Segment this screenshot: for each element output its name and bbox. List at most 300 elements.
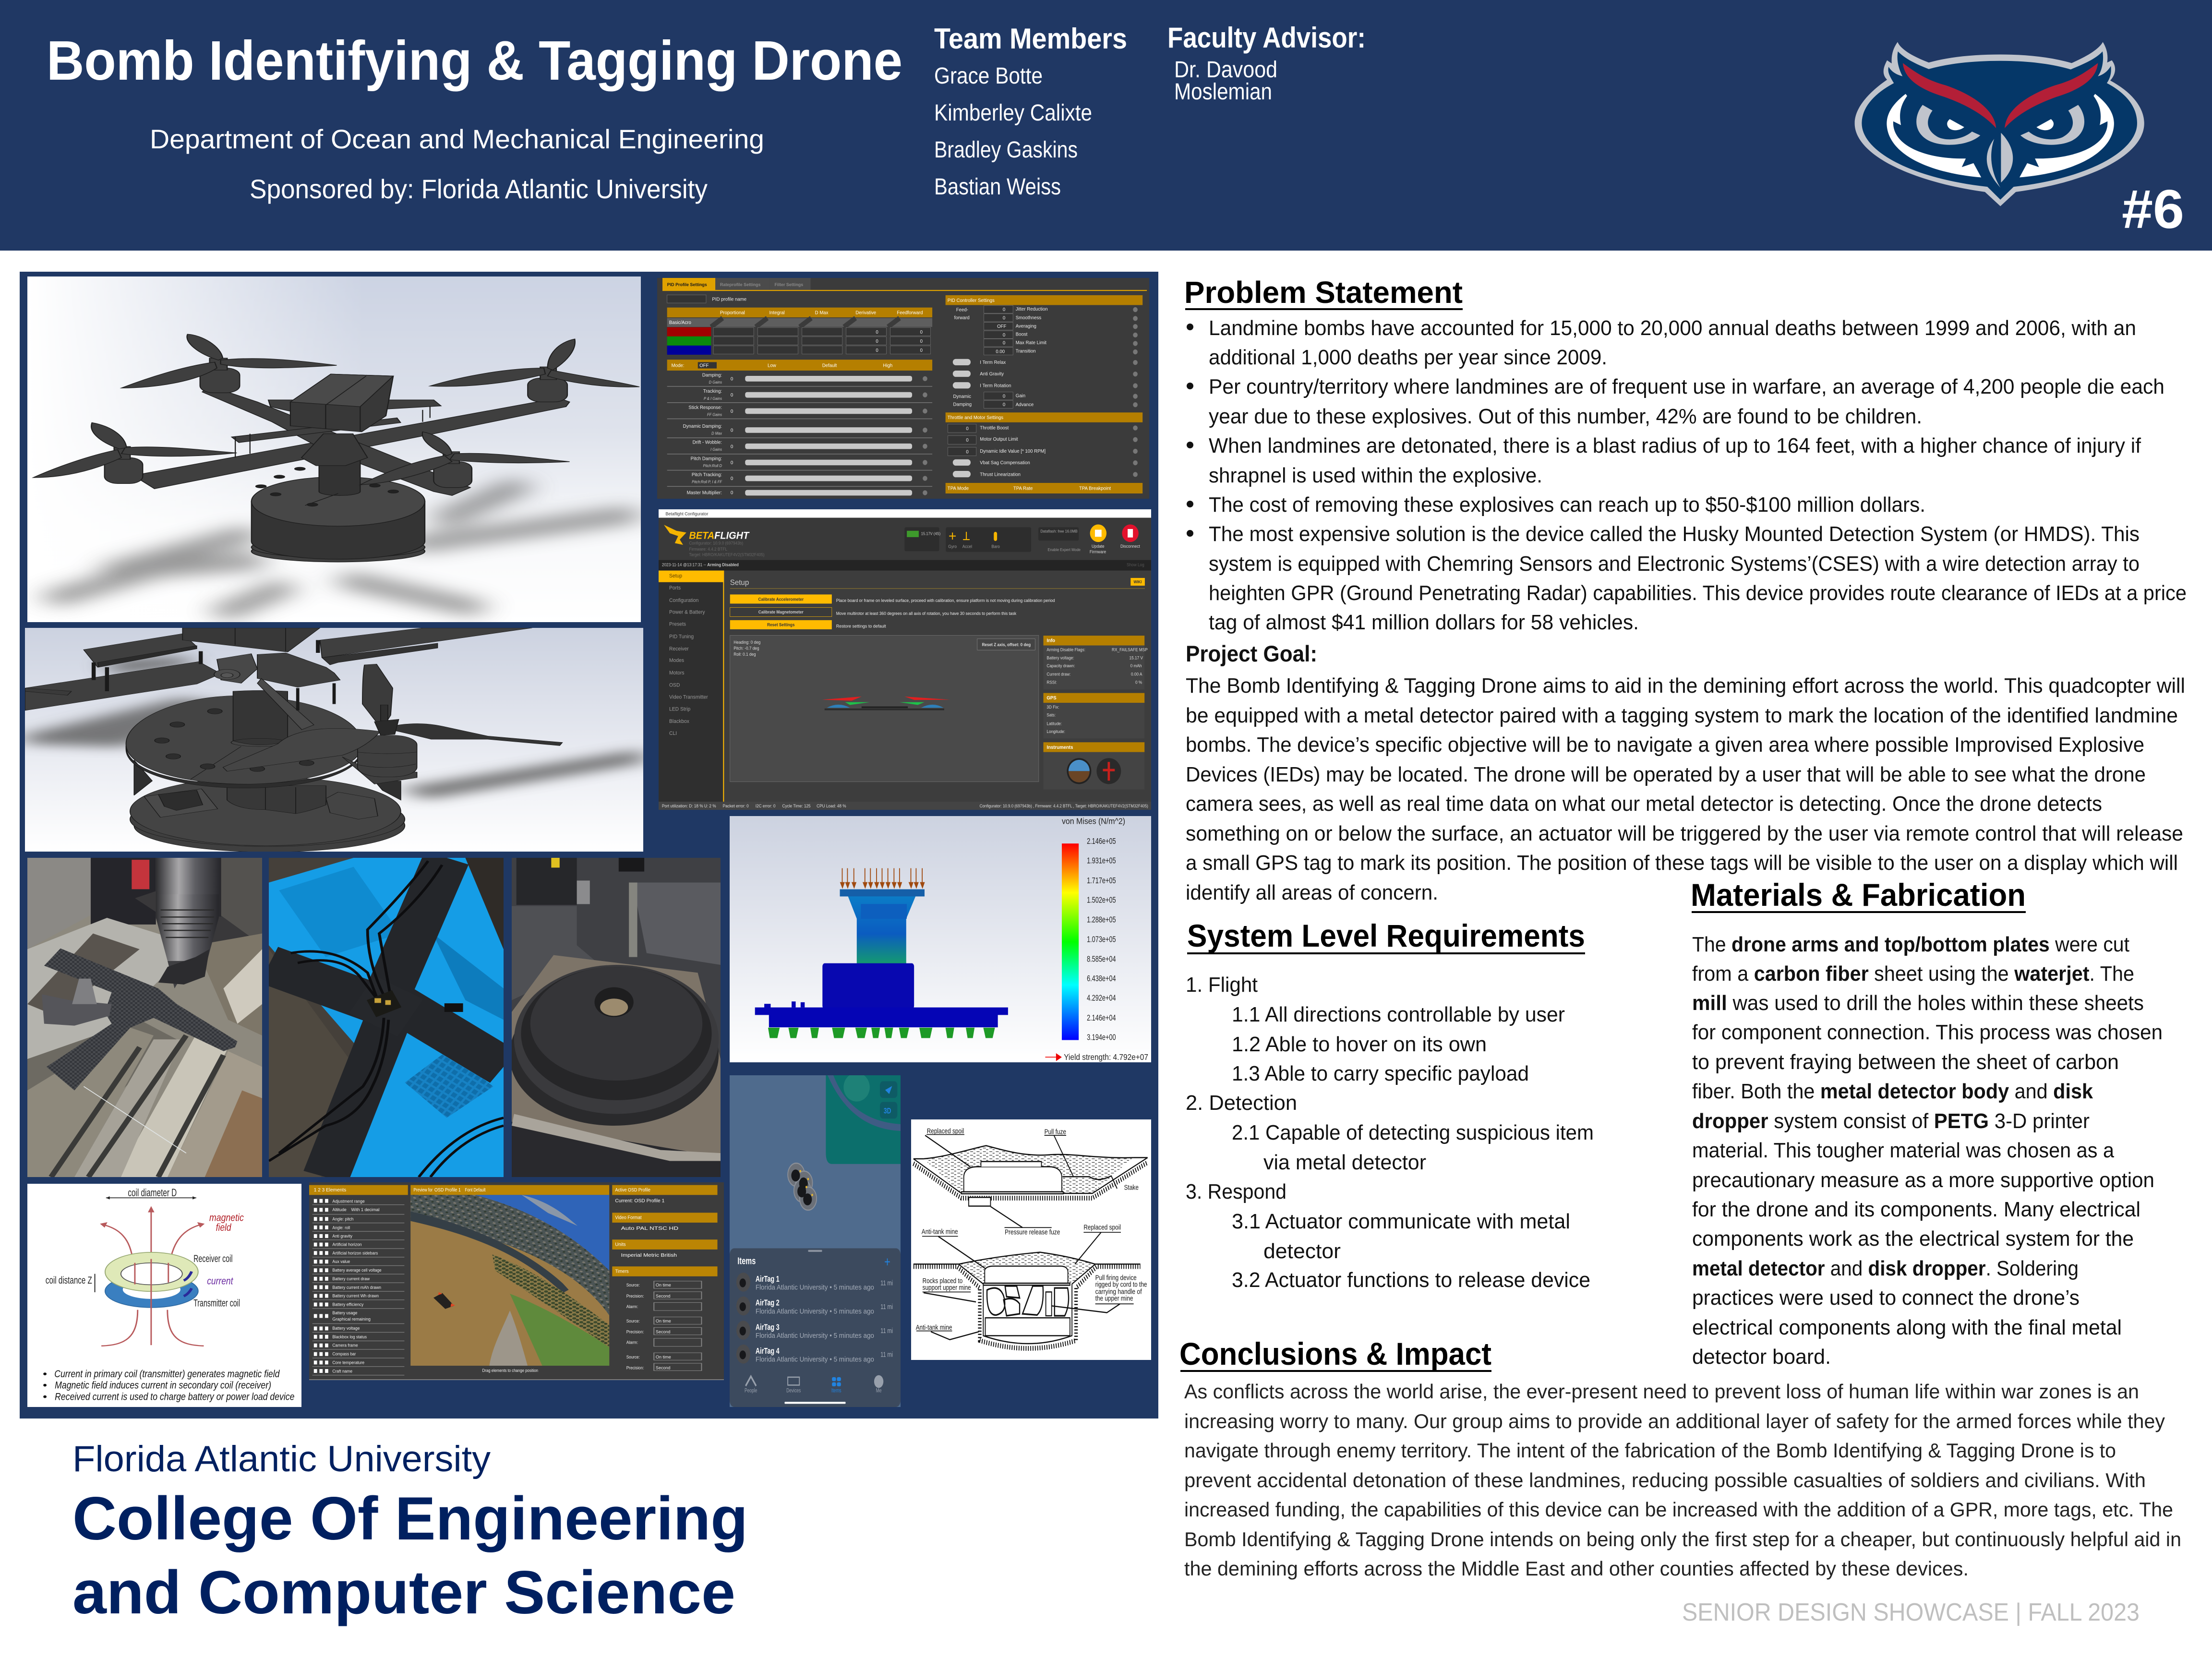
text block: conclusions: navigate through enemy territory. The intent of the fabrication of the Bomb Identifying & Tagging Drone is to (1184, 1439, 2116, 1462)
stress color scale: Yield strength: 4.792e+07 (1064, 1053, 1148, 1062)
screenshot: PID tuning settings: Damping: (702, 373, 722, 378)
screenshot: Betaflight configurator: BETAFLIGHT (689, 530, 750, 541)
screenshot: PID tuning settings: Basic/Acro (669, 320, 691, 325)
team members: Grace Botte (934, 63, 1043, 89)
screenshot: Betaflight configurator: I2C error: 0 (756, 804, 776, 808)
screenshot: OSD configuration: Current: OSD Profile 1 (615, 1198, 664, 1203)
screenshot: OSD configuration: Battery usage (332, 1310, 358, 1315)
screenshot: Betaflight configurator: Instruments (1046, 745, 1073, 750)
heading: Problem Statement: Problem Statement (1184, 275, 1463, 310)
screenshot: PID tuning settings: Anti Gravity (980, 372, 1004, 377)
screenshot: PID tuning settings: 0 (920, 348, 923, 353)
text block: materials and fabrication (1692, 933, 2163, 1369)
screenshot: Betaflight configurator: Blackbox (669, 719, 690, 724)
diagram: wireless power coil: • (43, 1368, 47, 1380)
screenshot: Betaflight configurator: Target: HBRO/KAKUTEF4V2(STM32F405) (689, 552, 765, 557)
screenshot: Betaflight configurator: LED Strip (669, 706, 690, 712)
screenshot: OSD configuration: On time (656, 1283, 671, 1287)
stress color scale: 1.288e+05 (1087, 915, 1116, 925)
screenshot: Betaflight configurator: Arming Disable Flags: (1046, 647, 1085, 652)
screenshot: PID tuning settings: 0 (1003, 402, 1006, 408)
stress color scale: 2.146e+04 (1087, 1013, 1116, 1023)
screenshot: OSD configuration: Active OSD Profile (615, 1188, 650, 1193)
screenshot: PID tuning settings: Advance (1016, 402, 1034, 408)
screenshot: PID tuning settings: Tracking: (703, 389, 722, 394)
coil label: coil diameter D (128, 1187, 177, 1199)
screenshot: PID tuning settings: Boost (1016, 332, 1028, 337)
screenshot: OSD configuration: Battery voltage (332, 1326, 360, 1331)
panel: image collage (20, 272, 1158, 1419)
screenshot: PID tuning settings: 0 (966, 438, 969, 443)
text block: problem bullets: additional 1,000 deaths per year since 2009. (1209, 346, 1607, 369)
screenshot: OSD configuration: Artificial horizon (332, 1242, 362, 1247)
screenshot: PID tuning settings: Derivative (855, 310, 877, 316)
screenshot: PID tuning settings: I Term Rotation (980, 383, 1011, 389)
screenshot: PID tuning settings: PID profile name (712, 297, 747, 302)
text block: requirements list: 1.3 Able to carry specific payload (1232, 1062, 1529, 1085)
screenshot: OSD configuration: Auto PAL NTSC HD (621, 1226, 678, 1231)
screenshot: PID tuning settings: Averaging (1016, 324, 1036, 329)
text block: problem bullets: heighten GPR (Ground Penetrating Radar) capabilities. This device provides route clearance of IEDs at a price (1209, 581, 2187, 605)
screenshot: PID tuning settings: 0 (731, 393, 733, 398)
diagram: anti-tank mine placement: Pressure release fuze (1005, 1228, 1060, 1236)
diagram: wireless power coil: field (216, 1222, 231, 1233)
text block: requirements list: 1. Flight (1186, 973, 1258, 997)
screenshot: Betaflight configurator: Video Transmitter (669, 694, 708, 700)
screenshot: OSD configuration: Preview for (413, 1188, 433, 1193)
tab bar: Me (876, 1388, 882, 1394)
motor and propeller (33, 422, 237, 483)
item list (736, 1273, 893, 1364)
stress color scale: 1.502e+05 (1087, 896, 1116, 905)
stress color scale: 3.194e+00 (1087, 1033, 1116, 1042)
screenshot: PID tuning settings: 0 (731, 460, 733, 466)
screenshot: PID tuning settings: Jitter Reduction (1016, 307, 1048, 312)
item list: 11 mi (880, 1279, 893, 1287)
screenshot: OSD configuration: Angle: pitch (332, 1216, 353, 1221)
screenshot: PID tuning settings: Proportional (720, 310, 745, 316)
screenshot: PID tuning settings: Damping (953, 402, 972, 407)
college wordmark: and Computer Science (72, 1558, 735, 1626)
screenshot: Betaflight configurator: Power & Battery (669, 609, 705, 615)
stress color scale: von Mises (N/m^2) (1062, 817, 1125, 826)
screenshot: PID tuning settings: TPA Breakpoint (1079, 486, 1111, 492)
screenshot: PID tuning settings: Low (768, 363, 777, 369)
faculty advisor: Faculty Advisor: (1167, 22, 1366, 54)
text block: project goal: identify all areas of concern. (1186, 881, 1438, 904)
diagram: wireless power coil: • (43, 1391, 47, 1402)
stress color scale: 1.073e+05 (1087, 935, 1116, 944)
image: close-up CAD render (25, 628, 643, 852)
text block: problem bullets: The cost of removing these explosives can reach up to $50-$100 million dollars. (1209, 493, 1925, 517)
text block: materials and fabrication: The drone arms and top/bottom plates were cut (1692, 933, 2129, 956)
item list: 11 mi (880, 1350, 893, 1358)
diagram: wireless power coil: Receiver coil (193, 1253, 233, 1264)
screenshot: Betaflight configurator: Accel (962, 544, 972, 549)
screenshot: OSD configuration: Battery current draw (332, 1276, 370, 1281)
tab bar: Devices (786, 1388, 801, 1394)
text block: conclusions: As conflicts across the world arise, the ever-present need to prevent loss of human life within war zones is an (1184, 1380, 2139, 1403)
diagram: anti-tank mine placement: Replaced spoil (1083, 1223, 1121, 1231)
screenshot: Betaflight configurator: Restore settings to default (836, 624, 886, 628)
screenshot: Betaflight configurator: Firmware (1090, 549, 1106, 554)
screenshot: PID tuning settings: Dynamic Damping: (683, 424, 722, 429)
screenshot: Betaflight configurator: 0.00 A (1131, 672, 1142, 677)
screenshot: PID tuning settings: Feed- (956, 307, 968, 313)
text block: problem bullets: Per country/territory where landmines are of frequent use in warfare, an average of 4,200 people die each (1209, 375, 2164, 398)
screenshot: Betaflight configurator: Configurator: 10.9.0 (697943b) (689, 541, 743, 545)
text block: project goal: camera sees, as well as real time data on what our metal detector is detecting. Once the drone detects (1186, 792, 2102, 816)
screenshot: PID tuning settings: Default (822, 363, 837, 369)
screenshot: PID tuning settings: Transition (1016, 349, 1036, 354)
screenshot: OSD configuration: Battery average cell voltage (332, 1268, 382, 1273)
text block: materials and fabrication: practices were used to connect the drone’s (1692, 1286, 2080, 1310)
screenshot: PID tuning settings: Gain (1016, 393, 1025, 399)
screenshot: Betaflight configurator: OSD (669, 682, 680, 688)
screenshot: Betaflight configurator: Enable Expert Mode (1047, 548, 1081, 552)
screenshot: OSD configuration: Timers (615, 1269, 629, 1274)
title: Bomb Identifying & Tagging Drone (47, 29, 902, 92)
motor and propeller (360, 432, 570, 488)
screenshot: PID tuning settings: 0 (966, 426, 969, 432)
screenshot: PID tuning settings: Dynamic (953, 394, 971, 399)
screenshot: PID tuning settings: 0 (876, 330, 878, 335)
image: drone CAD render (27, 276, 641, 622)
text block: requirements list: 3.2 Actuator functions to release device (1232, 1268, 1590, 1292)
screenshot: PID tuning settings: 0 (1003, 307, 1006, 313)
text block: project goal: a small GPS tag to mark its position. The position of these tags will be visible to the user on a display which will (1186, 851, 2178, 875)
screenshot: Betaflight configurator: 0 mAh (1130, 663, 1142, 668)
screenshot: AirTag item tracker (730, 1075, 901, 1407)
screenshot: PID tuning settings: Throttle Boost (980, 425, 1009, 431)
text block: conclusions: increasing worry to many. Our group aims to provide an additional layer of safety for the armed forces while they (1184, 1410, 2165, 1432)
diagram: wireless power coil: Transmitter coil (193, 1297, 240, 1309)
text block: requirements list: 1.1 All directions controllable by user (1232, 1003, 1565, 1026)
screenshot: PID tuning settings: Motor Output Limit (980, 437, 1018, 442)
text block: requirements list: 2. Detection (1186, 1091, 1297, 1115)
diagram: anti-tank mine placement: Pull fuze (1045, 1128, 1066, 1136)
screenshot: Betaflight configurator: Sats: (1046, 713, 1056, 718)
department line: Department of Ocean and Mechanical Engineering (150, 124, 764, 154)
screenshot: PID tuning settings: Pitch Tracking: (692, 472, 722, 478)
screenshot: OSD configuration: Source: (626, 1355, 640, 1359)
screenshot: OSD configuration: Imperial Metric British (621, 1253, 677, 1258)
screenshot: PID tuning settings: Rateprofile Settings (720, 282, 760, 287)
screenshot: Betaflight configurator: RX_FAILSAFE MSP (1112, 647, 1148, 652)
footer: showcase label: SENIOR DESIGN SHOWCASE | FALL 2023 (1682, 1599, 2140, 1626)
text block: problem bullets: year due to these explosives. Out of this number, 42% are found to be children. (1209, 405, 1922, 428)
item list: Florida Atlantic University • 5 minutes ago (756, 1355, 874, 1363)
screenshot: PID tuning settings: 0 (920, 339, 923, 344)
heading: Project Goal: Project Goal: (1186, 641, 1317, 666)
item list: AirTag 2 (756, 1298, 780, 1308)
diagram: wireless power coil: magnetic (209, 1212, 244, 1223)
screenshot: OSD configuration: Adjustment range (332, 1199, 365, 1203)
item list: 11 mi (880, 1302, 893, 1311)
screenshot: OSD configuration: Aux value (332, 1259, 350, 1264)
screenshot: PID tuning settings: 0 (731, 376, 733, 382)
screenshot: OSD configuration: Source: (626, 1283, 640, 1287)
text block: materials and fabrication: detector board. (1692, 1345, 1831, 1369)
diagram: wireless power coil: coil distance Z (46, 1274, 92, 1286)
screenshot: PID tuning settings: I Gains (710, 447, 722, 452)
text block: requirements list (1186, 973, 1594, 1292)
item list: Florida Atlantic University • 5 minutes ago (756, 1331, 874, 1339)
item list: 11 mi (880, 1326, 893, 1334)
item list: Florida Atlantic University • 5 minutes ago (756, 1307, 874, 1315)
diagram: anti-tank mine placement: Anti-tank mine (916, 1323, 952, 1331)
bomb location markers (788, 1163, 817, 1210)
diagram: anti-tank mine placement: carrying handle of (1095, 1287, 1142, 1296)
item list: AirTag 1 (756, 1274, 780, 1284)
screenshot: OSD configuration: Blackbox log status (332, 1334, 367, 1339)
screenshot: PID tuning settings: Thrust Linearization (980, 472, 1021, 477)
screenshot: OSD configuration: On time (656, 1319, 671, 1323)
screenshot: PID tuning settings: Master Multiplier: (687, 490, 722, 496)
text block: project goal: The Bomb Identifying & Tagging Drone aims to aid in the demining effort across the world. This quadcopter will (1186, 674, 2185, 697)
screenshot: Betaflight configurator: Reset Settings (767, 622, 795, 627)
screenshot: OSD configuration: Font Default (465, 1188, 485, 1193)
screenshot: PID tuning settings: 0.00 (996, 349, 1005, 354)
text block: materials and fabrication: dropper system consist of PETG 3-D printer (1692, 1109, 2090, 1133)
screenshot: Betaflight configurator: Configuration (669, 598, 698, 603)
screenshot: OSD configuration: Artificial horizon sidebars (332, 1250, 378, 1256)
screenshot: OSD configuration: With 1 decimal (351, 1207, 379, 1212)
screenshot: OSD configuration (309, 1182, 724, 1380)
screenshot: PID tuning settings: Max Rate Limit (1016, 340, 1046, 346)
screenshot: OSD configuration: Units (615, 1242, 625, 1247)
sponsor line: Sponsored by: Florida Atlantic University (250, 174, 708, 204)
text block: requirements list: detector (1263, 1239, 1341, 1263)
text block: problem bullets (1187, 316, 2187, 634)
screenshot: Betaflight configurator: Configurator: 10.9.0 (697943b) , Firmware: 4.4.2 BTFL , Target: HBRO/KAKUTEF4V2(STM32F405) (980, 804, 1148, 808)
heading: Materials & Fabrication: Materials & Fabrication (1691, 877, 2026, 913)
screenshot: PID tuning settings: 0 (1003, 333, 1006, 338)
screenshot: Betaflight configurator: RSSI: (1046, 680, 1057, 685)
text block: materials and fabrication: precautionary measure as a more supportive option (1692, 1168, 2154, 1192)
screenshot: PID tuning settings: Integral (769, 310, 785, 316)
screenshot: OSD configuration: Battery efficiency (332, 1302, 363, 1307)
diagram: anti-tank mine placement: Stake (1124, 1183, 1139, 1191)
screenshot: PID tuning settings: Throttle and Motor Settings (948, 415, 1003, 421)
screenshot: OSD configuration: Video Format (615, 1215, 642, 1220)
stress color scale: 1.717e+05 (1087, 876, 1116, 886)
text block: materials and fabrication: to prevent fraying between the sheet of carbon (1692, 1050, 2119, 1074)
text block: requirements list: 2.1 Capable of detecting suspicious item (1232, 1121, 1594, 1144)
screenshot: PID tuning settings: Pitch Damping: (691, 456, 722, 461)
screenshot: Betaflight configurator (659, 509, 1151, 810)
screenshot: Betaflight configurator: Update (1092, 544, 1105, 549)
stress color scale: 4.292e+04 (1087, 994, 1116, 1003)
screenshot: Betaflight configurator: GPS (1046, 696, 1057, 701)
motor and propeller (430, 339, 639, 402)
screenshot: PID tuning settings: 0 (920, 330, 923, 335)
text block: requirements list: 1.2 Able to hover on its own (1232, 1033, 1487, 1056)
tab bar (745, 1375, 883, 1404)
screenshot: OSD configuration: Precision: (626, 1329, 644, 1334)
text block: materials and fabrication: electrical components along with the final metal (1692, 1316, 2122, 1339)
screenshot: OSD configuration: Anti gravity (332, 1234, 352, 1238)
text block: problem bullets: shrapnel is used within the explosive. (1209, 464, 1542, 487)
team members: Bradley Gaskins (934, 137, 1078, 163)
screenshot: OSD configuration: Drag elements to change position (482, 1368, 538, 1373)
screenshot: Betaflight configurator: WIKI (1134, 580, 1142, 584)
text block: materials and fabrication: from a carbon fiber sheet using the waterjet. The (1692, 962, 2134, 986)
college wordmark: College Of Engineering (72, 1484, 748, 1552)
screenshot: Betaflight configurator: 0 % (1135, 680, 1142, 685)
screenshot: PID tuning settings: 0 (731, 490, 733, 496)
3D drone model (822, 697, 950, 710)
photo: wiring on blue mat (269, 858, 504, 1177)
diagram: anti-tank mine placement: rigged by cord to the (1095, 1280, 1147, 1288)
screenshot: OSD configuration: OSD Profile 1 (434, 1188, 461, 1193)
team members (934, 23, 1127, 200)
screenshot: PID tuning settings: PID Profile Settings (667, 282, 707, 287)
screenshot: PID tuning settings: 0 (1003, 315, 1006, 321)
diagram: wireless power coil: • (43, 1380, 47, 1391)
text block: requirements list: via metal detector (1263, 1151, 1426, 1174)
faculty advisor (1167, 22, 1366, 105)
screenshot: AirTag item tracker: Items (737, 1255, 756, 1266)
screenshot: PID tuning settings: 0 (966, 449, 969, 455)
diagram: anti-tank mine placement: support upper mine (923, 1284, 971, 1292)
screenshot: OSD configuration: Precision: (626, 1365, 644, 1370)
screenshot: OSD configuration: Compass bar (332, 1352, 356, 1357)
team members: Kimberley Calixte (934, 100, 1092, 126)
screenshot: OSD configuration: Source: (626, 1319, 640, 1323)
screenshot: Betaflight configurator: 15.17 V (1130, 655, 1143, 660)
text block: project goal (1186, 674, 2185, 904)
screenshot: PID tuning settings: D Max (815, 310, 828, 316)
screenshot: OSD configuration: Camera frame (332, 1343, 358, 1348)
text block: materials and fabrication: for the drone and its components. Many electrical (1692, 1198, 2140, 1221)
screenshot: OSD configuration: Graphical remaining (332, 1317, 371, 1322)
screenshot: OSD configuration: Craft name (332, 1369, 352, 1373)
screenshot: PID tuning settings: Dynamic Idle Value [* 100 RPM] (980, 449, 1046, 454)
diagram: wireless power coil (27, 1184, 301, 1407)
text block: materials and fabrication: material. This tougher material was chosen as a (1692, 1139, 2114, 1162)
screenshot: Betaflight configurator: Gyro (948, 544, 957, 549)
text block: materials and fabrication: metal detector and disk dropper. Soldering (1692, 1257, 2079, 1280)
screenshot: Betaflight configurator: Reset Z axis, offset: 0 deg (982, 642, 1031, 647)
diagram: wireless power coil: current (207, 1275, 234, 1286)
screenshot: OSD configuration: Angle: roll (332, 1225, 350, 1230)
screenshot: Betaflight configurator: 2023-11-14 @13:17:31 -- Arming Disabled (662, 563, 739, 567)
screenshot: PID tuning settings: 0 (731, 476, 733, 481)
screenshot: PID tuning settings: I Term Relax (980, 360, 1006, 365)
text block: materials and fabrication: for component connection. This process was chosen (1692, 1021, 2163, 1044)
screenshot: OSD configuration: Precision: (626, 1294, 644, 1298)
stress color scale: 1.931e+05 (1087, 856, 1116, 866)
college wordmark: Florida Atlantic University (72, 1439, 491, 1479)
screenshot: Betaflight configurator: Info (1046, 638, 1055, 643)
screenshot: Betaflight configurator: Battery voltage: (1046, 655, 1074, 660)
screenshot: PID tuning settings (657, 278, 1149, 499)
text block: conclusions (1184, 1380, 2181, 1580)
text block: project goal: be equipped with a metal detector paired with a tagging system to mark the location of the identified landmine (1186, 704, 2178, 727)
screenshot: AirTag item tracker: + (884, 1253, 890, 1270)
screenshot: PID tuning settings: PID Controller Settings (948, 298, 995, 303)
text block: problem bullets: The most expensive solution is the device called the Husky Mounted Detection System (or HMDS). This (1209, 522, 2140, 546)
screenshot: OSD configuration: Core temperature (332, 1360, 364, 1365)
screenshot: PID tuning settings: Drift - Wobble: (693, 440, 722, 445)
item list: AirTag 3 (756, 1322, 780, 1332)
heading: Conclusions & Impact: Conclusions & Impact (1179, 1336, 1491, 1371)
screenshot: PID tuning settings: forward (954, 315, 970, 321)
coils (105, 1252, 198, 1308)
text block: problem bullets: Landmine bombs have accounted for 15,000 to 20,000 annual deaths between 1999 and 2006, with an (1209, 316, 2136, 340)
screenshot: Betaflight configurator: Presets (669, 621, 686, 627)
item list: Florida Atlantic University • 5 minutes ago (756, 1283, 874, 1291)
screenshot: PID tuning settings: P & I Gains (704, 397, 722, 401)
diagram: anti-tank mine placement: Rocks placed to (923, 1276, 962, 1285)
screenshot: Betaflight configurator: CPU Load: 48 % (817, 804, 846, 808)
screenshot: PID tuning settings: 0 (876, 339, 878, 344)
faculty advisor: Dr. Davood (1174, 57, 1277, 83)
screenshot: OSD configuration: Battery current mAh drawn (332, 1285, 381, 1290)
screenshot: OSD configuration: Alarm: (626, 1340, 638, 1345)
screenshot: OSD configuration: Second (656, 1329, 671, 1334)
screenshot: OSD configuration: Altitude (332, 1207, 347, 1212)
screenshot: Betaflight configurator: Roll: 0.1 deg (733, 652, 756, 657)
screenshot: AirTag item tracker: 3D (884, 1107, 891, 1116)
screenshot: PID tuning settings: 0 (1003, 394, 1006, 399)
screenshot: PID tuning settings: OFF (699, 363, 709, 369)
text block: project goal: Devices (IEDs) may be located. The drone will be operated by a user that will be able to see what the drone (1186, 763, 2146, 786)
screenshot: PID tuning settings: FF Gains (707, 412, 722, 417)
screenshot: OSD configuration: Second (656, 1365, 671, 1370)
stress model (755, 868, 1008, 1038)
college wordmark (72, 1439, 748, 1626)
screenshot: PID tuning settings: Feedforward (897, 310, 923, 316)
diagram: anti-tank mine placement (911, 1119, 1151, 1360)
text block: requirements list: 3.1 Actuator communicate with metal (1232, 1210, 1570, 1233)
screenshot: Betaflight configurator: Current draw: (1046, 672, 1070, 677)
screenshot: PID tuning settings: Vbat Sag Compensation (980, 460, 1030, 466)
screenshot: Betaflight configurator: Ports (669, 585, 681, 591)
screenshot: PID tuning settings: OFF (997, 324, 1006, 329)
screenshot: PID tuning settings: Stick Response: (688, 405, 722, 410)
screenshot: PID tuning settings: 0 (731, 444, 733, 449)
screenshot: Betaflight configurator: Latitude: (1046, 721, 1062, 726)
screenshot: OSD configuration: Second (656, 1294, 671, 1298)
tab bar: People (745, 1388, 757, 1394)
screenshot: OSD configuration: Alarm: (626, 1304, 638, 1309)
photo: carbon fiber plate on mill (27, 858, 262, 1177)
screenshot: PID tuning settings: TPA Mode (948, 486, 969, 492)
text block: project goal: something on or below the surface, an actuator will be triggered by the user via remote control that will release (1186, 822, 2183, 845)
screenshot: PID tuning settings: 0 (1003, 340, 1006, 346)
screenshot: Betaflight configurator: Receiver (669, 646, 689, 652)
text block: conclusions: increased funding, the capabilities of this device can be increased with the addition of a GPR, more tags, etc. The (1184, 1498, 2173, 1521)
diagram: anti-tank mine placement: Anti-tank mine (922, 1227, 958, 1236)
screenshot: PID tuning settings: 0 (876, 348, 878, 353)
text block: conclusions: Bomb Identifying & Tagging Drone intends on being only the first step for a cheaper, but continuously helpful aid in (1184, 1528, 2181, 1551)
text block: materials and fabrication: components work as the electrical system for the (1692, 1227, 2134, 1250)
motor and propeller (121, 334, 337, 393)
text block: problem bullets: tag of almost $41 million dollars for 58 vehicles. (1209, 611, 1639, 634)
heading: System Level Requirements: System Level Requirements (1187, 918, 1585, 953)
screenshot: Betaflight configurator: Port utilization: D: 18 % U: 2 % (662, 804, 716, 808)
stress color scale (1045, 817, 1148, 1062)
screenshot: Betaflight configurator: 15.17V (4S) (921, 531, 940, 536)
screenshot: PID tuning settings: Pitch:Roll P, I & FF (692, 480, 722, 484)
screenshot: Betaflight configurator: Capacity drawn: (1046, 663, 1075, 668)
screenshot: Betaflight configurator: Cycle Time: 125 (782, 804, 811, 808)
item list: AirTag 4 (756, 1346, 780, 1356)
screenshot: Betaflight configurator: Heading: 0 deg (733, 640, 760, 645)
icon: FAU owl logo (1855, 42, 2144, 206)
